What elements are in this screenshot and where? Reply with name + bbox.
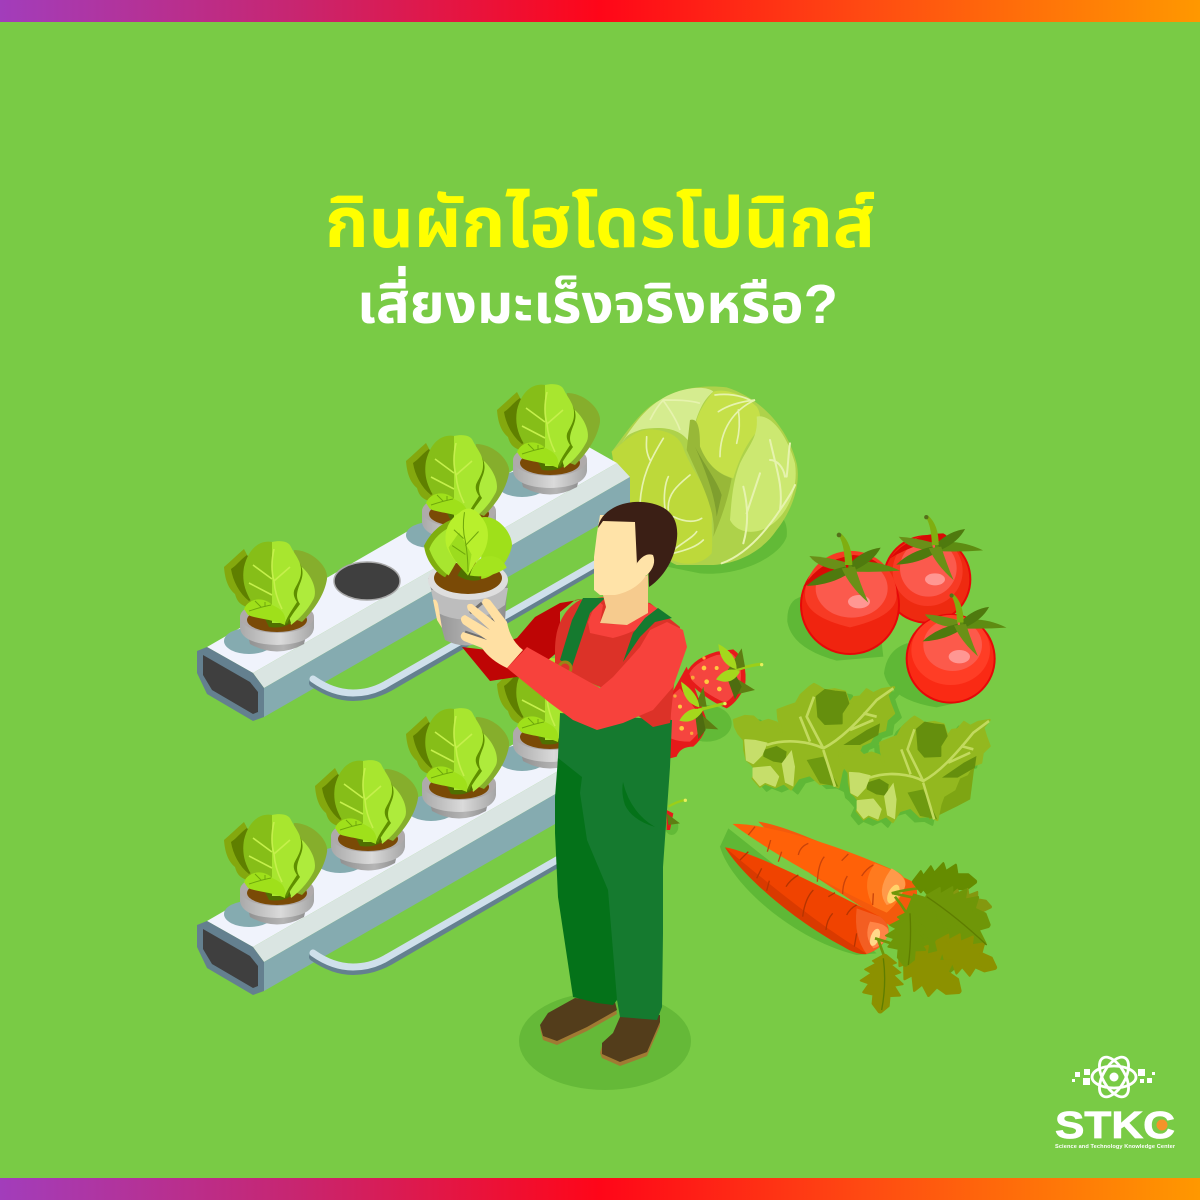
right strap <box>623 608 672 662</box>
collar <box>588 600 660 638</box>
held pot <box>428 560 508 646</box>
pipe opening <box>197 647 264 721</box>
plant near <box>224 541 327 654</box>
empty hole <box>334 562 400 600</box>
held lettuce <box>424 509 512 581</box>
trousers <box>556 713 672 1020</box>
strawberry back <box>685 644 763 708</box>
tomato right <box>906 593 1006 704</box>
hair <box>598 502 677 587</box>
lower pipe top face <box>207 711 617 947</box>
left leg <box>555 758 617 1005</box>
tomato left <box>800 533 900 655</box>
plant middle <box>406 435 509 548</box>
tomato shadows <box>787 597 970 707</box>
lower pipe side <box>264 751 630 991</box>
strawberry shadow <box>682 705 732 742</box>
lower pipe bevel <box>253 737 630 962</box>
shoes <box>540 998 660 1066</box>
title: เสี่ยงมะเร็งจริงหรือ? <box>357 265 838 335</box>
title: กินผักไฮโดรโปนิกส์ <box>325 184 875 262</box>
hydroponic rack: lower <box>197 658 630 995</box>
shirt <box>555 597 680 727</box>
logo dot <box>1156 1120 1168 1130</box>
logo subline: Science and Technology Knowledge Center <box>1055 1144 1176 1150</box>
lower plant 3 <box>406 708 509 821</box>
front arm <box>507 622 687 730</box>
top gradient bar <box>0 0 1200 22</box>
icon: cabbage <box>612 386 798 574</box>
carrot upper <box>733 824 905 913</box>
ground shadow <box>519 992 691 1090</box>
lower plant 4 <box>497 658 600 771</box>
pocket fold <box>622 782 655 827</box>
tomatoes, frilly lettuce and carrots <box>720 515 1006 1014</box>
face <box>594 515 647 595</box>
title <box>325 184 875 335</box>
farmer <box>424 502 691 1090</box>
hydroponic rack: upper <box>197 384 630 721</box>
frilly lettuce shadow <box>741 688 985 827</box>
bottom gradient bar <box>0 1178 1200 1200</box>
carrot lower <box>725 847 889 954</box>
lower plant 1 <box>224 814 327 927</box>
buckle <box>559 662 571 674</box>
logo wordmark: STKC <box>1055 1105 1175 1147</box>
pipe top face <box>207 437 617 673</box>
logo pixels <box>1072 1069 1155 1085</box>
plant far <box>497 384 600 497</box>
tomato back <box>883 515 983 624</box>
left strap <box>560 598 605 667</box>
lower hose <box>313 834 602 971</box>
lower pipe opening <box>197 921 264 995</box>
strawberry front <box>670 667 727 758</box>
logo atom <box>1092 1052 1136 1102</box>
frilly lettuce left <box>734 684 894 789</box>
strawberries <box>665 644 763 835</box>
carrot shadow <box>720 828 877 955</box>
frilly lettuce right <box>839 717 990 822</box>
hose <box>313 560 602 697</box>
ear <box>637 554 654 576</box>
neck <box>600 575 648 625</box>
lower plant 2 <box>315 760 418 873</box>
back arm <box>462 598 590 681</box>
strawberry bottom <box>665 799 687 835</box>
carrot greens <box>859 864 1003 1014</box>
pipe side <box>264 477 630 717</box>
logo: STKC <box>1055 1052 1176 1150</box>
carrot back <box>758 822 917 927</box>
pipe bevel <box>253 463 630 688</box>
hand <box>433 599 523 668</box>
